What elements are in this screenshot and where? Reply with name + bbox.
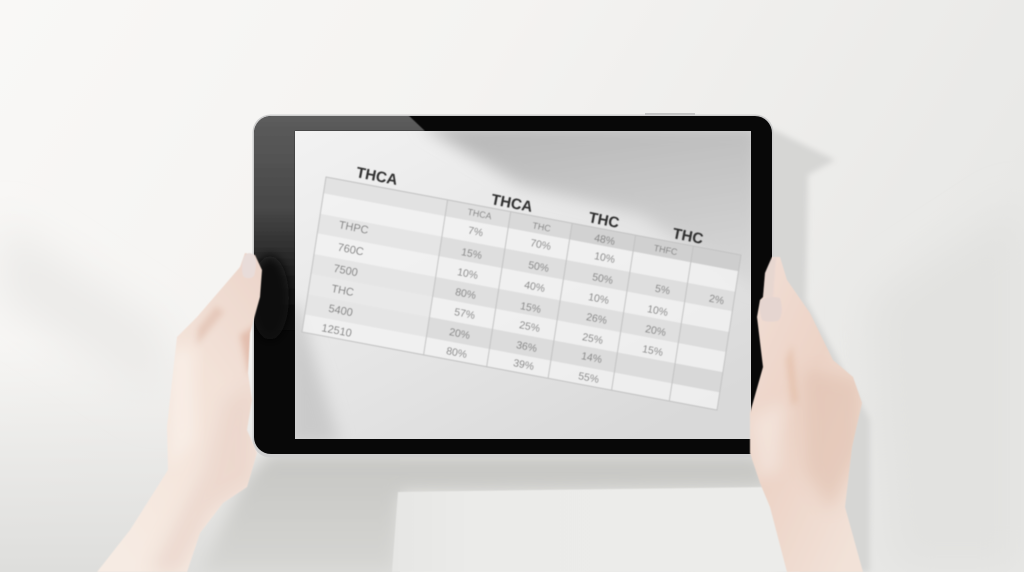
column values: 20% xyxy=(448,326,471,342)
column values: 15% xyxy=(460,246,483,262)
table grid xyxy=(302,177,741,410)
column values xyxy=(445,207,725,386)
column headings xyxy=(355,164,705,248)
column values: 14% xyxy=(580,350,603,366)
right hand xyxy=(750,257,863,572)
column headings: THC xyxy=(587,209,621,232)
column values: 26% xyxy=(585,311,608,327)
data table xyxy=(302,164,741,410)
left hand xyxy=(97,253,262,572)
column values: 5% xyxy=(654,283,671,297)
column headings: THCA xyxy=(490,191,534,216)
column values: 70% xyxy=(529,237,552,253)
left hand shading xyxy=(157,307,252,571)
column values: 25% xyxy=(581,331,604,347)
column values: 10% xyxy=(593,250,616,266)
column values: 20% xyxy=(644,323,667,339)
row labels: 12510 xyxy=(320,322,353,340)
column values: 50% xyxy=(591,271,614,287)
side button xyxy=(645,113,695,115)
right hand shading xyxy=(750,257,862,510)
column values: 7% xyxy=(467,225,484,239)
column values: 15% xyxy=(641,343,664,359)
column values: THCA xyxy=(467,207,493,221)
tablet edge xyxy=(252,114,774,458)
column values: 50% xyxy=(527,259,550,275)
row labels: 760C xyxy=(337,242,365,258)
column values: 15% xyxy=(519,300,542,316)
column values: THC xyxy=(532,220,552,234)
column values: 10% xyxy=(456,266,479,282)
right thumb nail xyxy=(760,297,782,322)
row labels: 5400 xyxy=(327,303,354,319)
column values: 80% xyxy=(445,345,468,361)
column values: THFC xyxy=(653,243,679,257)
light patch below tablet xyxy=(392,487,800,572)
column headings: THC xyxy=(671,225,705,248)
column values: 55% xyxy=(577,370,600,386)
tablet cast shadow: right side xyxy=(765,128,870,572)
column values: 36% xyxy=(515,339,538,355)
screen xyxy=(288,125,760,445)
row labels: 7500 xyxy=(332,263,359,279)
row labels: THPC xyxy=(338,219,369,237)
bezel xyxy=(250,112,772,454)
column values: 25% xyxy=(518,319,541,335)
column values: 10% xyxy=(646,303,669,319)
row labels xyxy=(320,219,369,340)
left thumb nail xyxy=(242,253,256,278)
tablet cast shadow: below xyxy=(200,454,775,572)
column values: 39% xyxy=(512,357,535,373)
column values: 48% xyxy=(593,232,616,248)
column values: 57% xyxy=(453,306,476,322)
tablet xyxy=(250,112,774,458)
column values: 80% xyxy=(454,286,477,302)
column values: 10% xyxy=(587,291,610,307)
column values: 2% xyxy=(708,293,725,307)
column headings: THCA xyxy=(355,164,399,189)
column values: 40% xyxy=(523,279,546,295)
row labels: THC xyxy=(330,283,355,299)
